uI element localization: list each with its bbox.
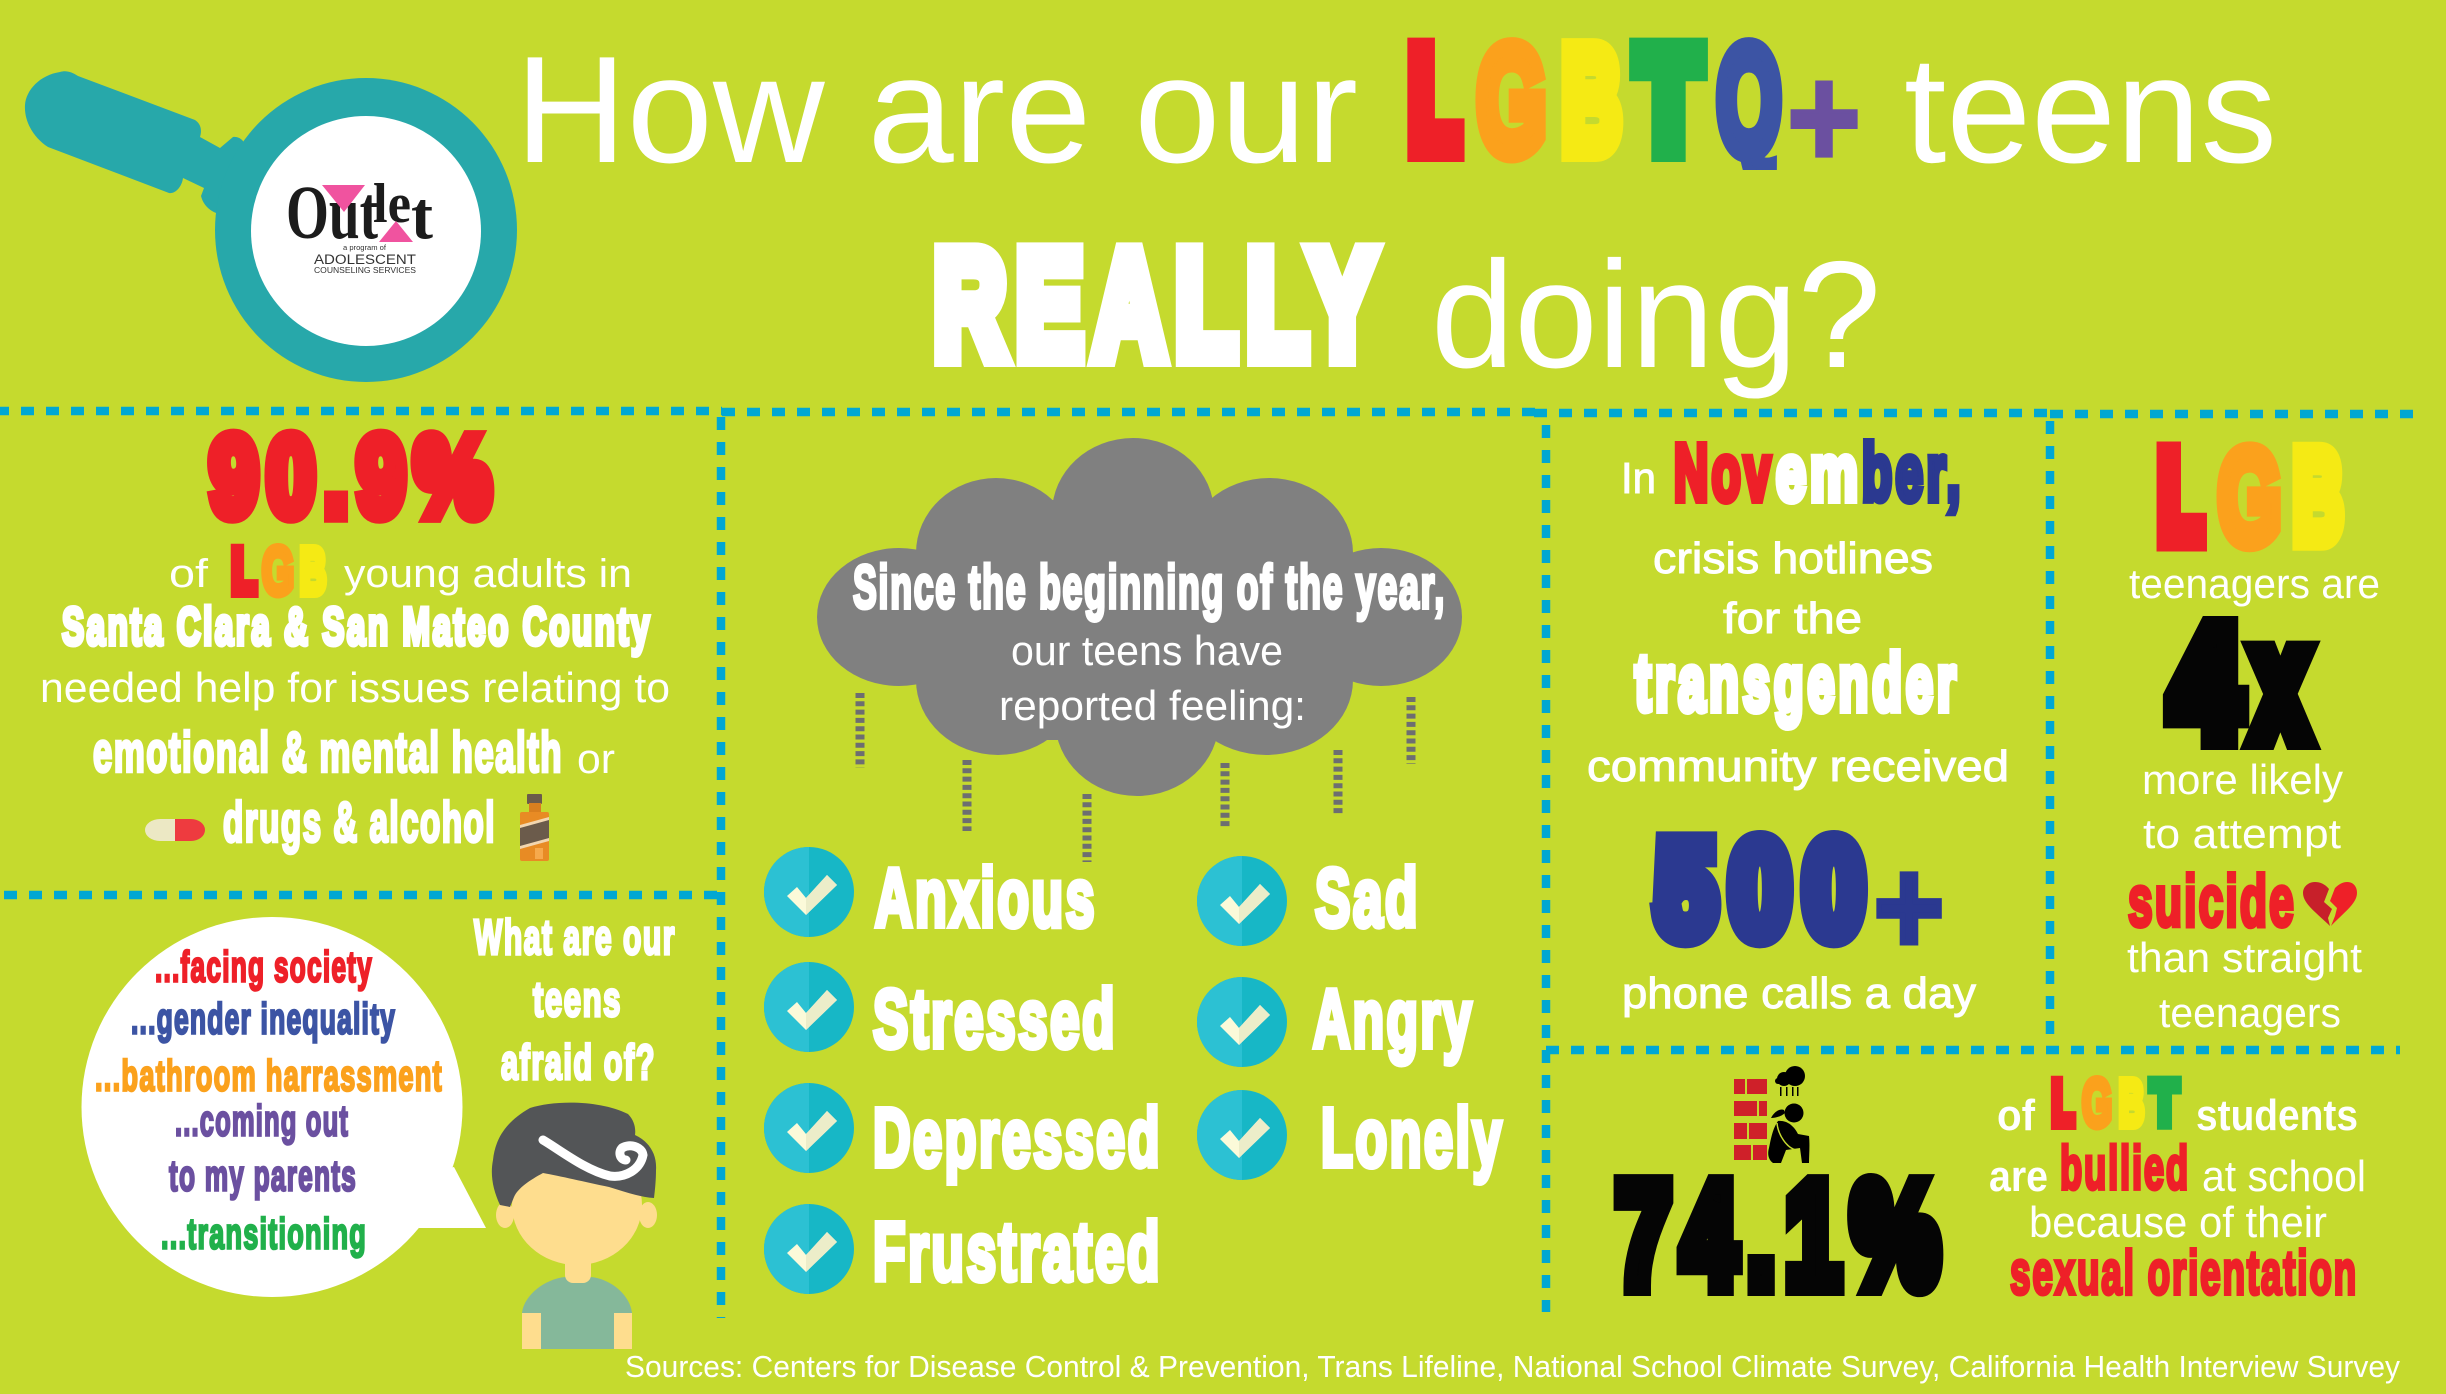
item: Depressed: Depressed xyxy=(873,1091,1162,1184)
text block: suicide: suicide xyxy=(2128,862,2296,942)
item: Lonely xyxy=(1197,1090,1504,1184)
title: rainbow LGBTQ+: B xyxy=(1562,18,1621,183)
text block: of LGBT students: students xyxy=(2196,1091,2358,1140)
text block: of LGBT students: T xyxy=(2151,1069,2178,1137)
text block: emotional and mental health: emotional & mental health xyxy=(93,720,563,784)
text block: emotional and mental health xyxy=(93,720,615,784)
text block: than straight teenagers xyxy=(2127,934,2362,1036)
checklist: feelings xyxy=(764,847,1504,1298)
text block: since the beginning of the year xyxy=(853,553,1446,729)
text block: crisis hotlines: transgender xyxy=(1635,638,1960,727)
callout: speech bubble: ...transitioning xyxy=(161,1210,367,1258)
heading: what are our teens afraid of: What are our xyxy=(474,911,676,965)
title: rainbow LGBTQ+: + xyxy=(1787,37,1861,198)
text block: since the beginning of the year: our teens have xyxy=(1011,627,1283,674)
panel: 74.1% bullied xyxy=(1616,1066,2366,1318)
callout: speech bubble: ...gender inequality xyxy=(131,994,396,1044)
stat: 90.9%: 90.9% xyxy=(210,414,500,539)
text block: more likely to attempt xyxy=(2142,756,2343,857)
icon: rain cloud xyxy=(817,438,1462,862)
text block: of LGBT students: of xyxy=(1997,1091,2035,1140)
title: rainbow LGBTQ+: Q xyxy=(1717,15,1781,186)
text block: drugs and alcohol: drugs & alcohol xyxy=(223,790,496,854)
text block: of LGB young adults: L xyxy=(232,537,256,605)
text block: crisis hotlines xyxy=(1587,534,2009,791)
text block: crisis hotlines: community received xyxy=(1587,742,2009,791)
item: Depressed xyxy=(764,1083,1162,1184)
callout: speech bubble: ...coming out xyxy=(175,1096,349,1146)
text block: more likely to attempt: more likely xyxy=(2142,756,2343,803)
item: Frustrated xyxy=(764,1204,1162,1298)
heading: what are our teens afraid of: afraid of? xyxy=(501,1036,656,1090)
callout: speech bubble: ...facing society xyxy=(155,942,373,992)
title: doing? xyxy=(1431,230,1881,400)
item: Stressed: Stressed xyxy=(873,972,1117,1065)
panel: what are our teens afraid of xyxy=(82,911,676,1349)
icon: sad figure by a brick wall xyxy=(1734,1066,1809,1163)
text block: of LGBT students: B xyxy=(2119,1067,2144,1139)
item: Anxious xyxy=(764,847,1097,944)
text block: are bullied at school: are xyxy=(1989,1152,2048,1201)
icon: bottle xyxy=(520,794,549,861)
heading: what are our teens afraid of: teens xyxy=(533,973,622,1027)
logo: Outlet wordmark: le xyxy=(373,173,411,235)
title: teens xyxy=(1904,25,2277,195)
item: Sad xyxy=(1197,851,1420,946)
text block: of LGB young adults: of xyxy=(169,552,209,596)
title: How are our xyxy=(515,25,1358,195)
stat: 4x: x xyxy=(2255,597,2306,769)
text block: of LGB young adults: G xyxy=(262,534,294,609)
icon: magnifying glass with Outlet logo xyxy=(25,71,517,382)
text block: are bullied at school: at school xyxy=(2202,1152,2366,1201)
icon: pill xyxy=(145,819,205,841)
item: Lonely: Lonely xyxy=(1321,1091,1504,1184)
text block: are bullied at school xyxy=(1989,1134,2366,1202)
heading: LGB: G xyxy=(2218,423,2281,572)
text block: of LGB young adults: young adults in xyxy=(344,552,632,596)
text block: of LGBT students xyxy=(1997,1066,2358,1141)
text block: In November xyxy=(1621,428,1964,517)
text block: than straight teenagers: than straight xyxy=(2127,934,2362,981)
text block: of LGBT students: L xyxy=(2052,1069,2074,1137)
callout: speech bubble: to my parents xyxy=(169,1152,357,1200)
item: Angry: Angry xyxy=(1313,972,1474,1065)
stat: 4x xyxy=(2172,597,2306,769)
panel: cloud and feelings xyxy=(764,438,1504,1298)
logo: Outlet wordmark: COUNSELING SERVICES xyxy=(314,266,416,275)
text block: of LGB young adults xyxy=(169,534,632,609)
logo: Outlet wordmark: t xyxy=(411,177,433,253)
title: rainbow LGBTQ+ xyxy=(1407,37,1858,170)
icon: broken heart xyxy=(2303,882,2357,926)
text block: more likely to attempt: to attempt xyxy=(2143,810,2341,857)
text block: of LGB young adults: B xyxy=(300,535,326,607)
item: Anxious: Anxious xyxy=(875,851,1097,944)
logo: Outlet wordmark: a program of xyxy=(343,243,387,252)
stat: 74.1%: 74.1% xyxy=(1616,1153,1950,1318)
title: REALLY xyxy=(934,220,1386,390)
heading: LGB: L xyxy=(2159,429,2202,566)
text block: of LGBT students: G xyxy=(2082,1066,2112,1141)
stat: 500+: 500 xyxy=(1656,813,1878,965)
logo: Outlet wordmark: ADOLESCENT xyxy=(314,252,416,267)
text block: county: Santa Clara & San Mateo County xyxy=(62,598,652,656)
text block: because of their: because of their xyxy=(2029,1198,2327,1247)
text block: phone calls a day: phone calls a day xyxy=(1622,969,1976,1018)
divider lines xyxy=(0,411,2416,1318)
heading: LGB: B xyxy=(2293,423,2343,569)
text block: than straight teenagers: teenagers xyxy=(2159,989,2341,1036)
title: rainbow LGBTQ+: G xyxy=(1477,15,1546,186)
stat: 4x: 4 xyxy=(2172,597,2239,769)
sources: Sources: Centers for Disease Control & Prevention, Trans Lifeline, National School Climate Survey, California Health Interview Survey xyxy=(625,1349,2400,1384)
text block: In November: em xyxy=(1776,428,1862,517)
title: rainbow LGBTQ+: L xyxy=(1410,21,1459,178)
icon: teen figure xyxy=(492,1103,657,1349)
text block: In November: In xyxy=(1621,454,1656,503)
text block: needed help: needed help for issues relating to xyxy=(40,664,670,711)
item: Stressed xyxy=(764,962,1117,1065)
stat: 500+: + xyxy=(1874,833,1944,982)
text block: emotional and mental health: or xyxy=(577,735,615,782)
text block: are bullied at school: bullied xyxy=(2060,1134,2190,1202)
text block: crisis hotlines: crisis hotlines xyxy=(1653,534,1933,583)
heading: LGB xyxy=(2159,423,2343,572)
text block: In November: ber, xyxy=(1862,428,1964,517)
text block: since the beginning of the year: Since the beginning of the year, xyxy=(853,553,1446,621)
text block: In November: Nov xyxy=(1674,428,1774,517)
item: Angry xyxy=(1197,972,1474,1067)
logo: Outlet wordmark: Out xyxy=(286,171,378,255)
item: Frustrated: Frustrated xyxy=(873,1205,1162,1298)
title: rainbow LGBTQ+: T xyxy=(1638,21,1699,178)
item: Sad: Sad xyxy=(1315,851,1420,944)
text block: since the beginning of the year: reported feeling: xyxy=(999,682,1306,729)
text block: crisis hotlines: for the xyxy=(1723,594,1862,643)
callout: speech bubble: ...bathroom harrassment xyxy=(95,1052,443,1100)
title xyxy=(515,15,2277,400)
panel: November crisis hotlines xyxy=(1587,428,2009,1018)
text block: teenagers are: teenagers are xyxy=(2129,560,2380,607)
panel: 90.9% needed help xyxy=(40,414,670,861)
callout: speech bubble xyxy=(82,917,486,1297)
heading: what are our teens afraid of xyxy=(474,911,676,1090)
panel: LGB 4x suicide xyxy=(2127,423,2380,1036)
logo: Outlet wordmark xyxy=(286,171,433,275)
